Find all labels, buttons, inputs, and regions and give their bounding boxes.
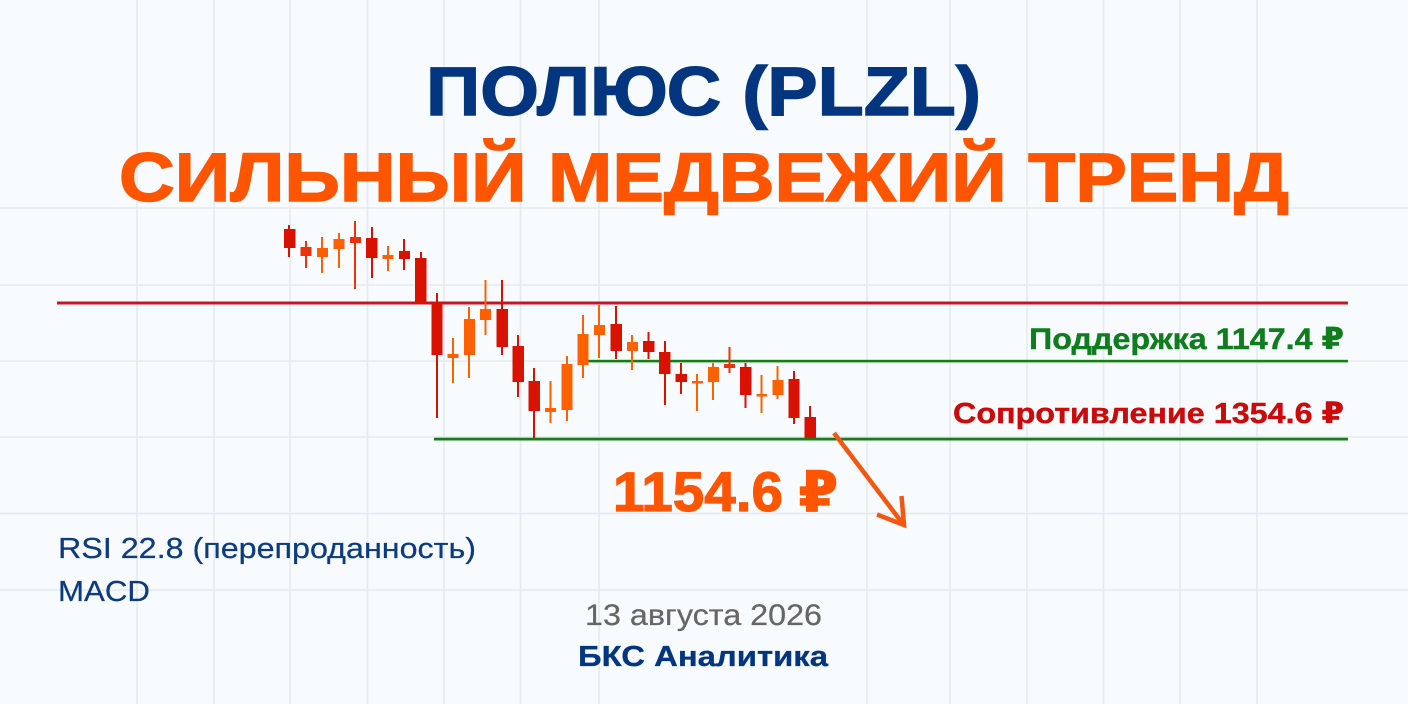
candle 18 (562, 356, 572, 421)
candle 22 (627, 335, 638, 370)
candle 11 (448, 338, 458, 383)
indicator: RSI: RSI 22.8 (перепроданность) (58, 533, 476, 565)
candle 30 (756, 375, 767, 413)
candle 26 (692, 374, 703, 411)
candle 2 (300, 241, 312, 268)
candle 29 (740, 363, 752, 408)
candle 33 (804, 406, 816, 438)
candle 27 (708, 363, 719, 400)
lower green level line (434, 438, 1348, 440)
candle 16 (528, 368, 540, 439)
candle 10 (432, 293, 442, 418)
candle 31 (772, 366, 784, 399)
subtitle: strong bearish trend: СИЛЬНЫЙ МЕДВЕЖИЙ ТРЕНД (119, 138, 1289, 216)
candle 12 (464, 307, 475, 378)
candle 3 (317, 237, 328, 273)
candle 9 (415, 252, 426, 303)
indicator: MACD: MACD (58, 576, 150, 608)
candle 5 (350, 221, 361, 289)
candle 13 (480, 280, 491, 335)
upper green level line (588, 360, 1348, 362)
candle 20 (594, 305, 605, 358)
resistance line (57, 302, 1348, 304)
date: 13 августа 2026 (585, 599, 822, 632)
candle 24 (659, 341, 670, 405)
candle 15 (512, 335, 524, 397)
candlestick chart (57, 221, 1348, 440)
candle 17 (545, 381, 556, 423)
title: company and ticker: ПОЛЮС (PLZL) (426, 53, 981, 130)
candle 1 (284, 225, 296, 257)
source: BCS Analytics: БКС Аналитика (578, 641, 829, 673)
support label: Поддержка 1147.4 ₽ (1029, 323, 1344, 356)
candle 28 (724, 347, 735, 373)
candle 7 (382, 246, 394, 271)
candle 23 (643, 332, 654, 359)
candle 21 (610, 306, 622, 359)
candle 14 (496, 280, 508, 355)
candle 32 (788, 371, 800, 424)
arrow: downward (834, 433, 904, 525)
current price: 1154.6 ₽ (613, 460, 838, 523)
candle 25 (676, 363, 687, 394)
resistance label: Сопротивление 1354.6 ₽ (953, 398, 1344, 430)
candle 8 (399, 239, 410, 270)
candle 4 (334, 233, 344, 268)
candle 19 (578, 315, 588, 378)
candle 6 (366, 227, 378, 278)
